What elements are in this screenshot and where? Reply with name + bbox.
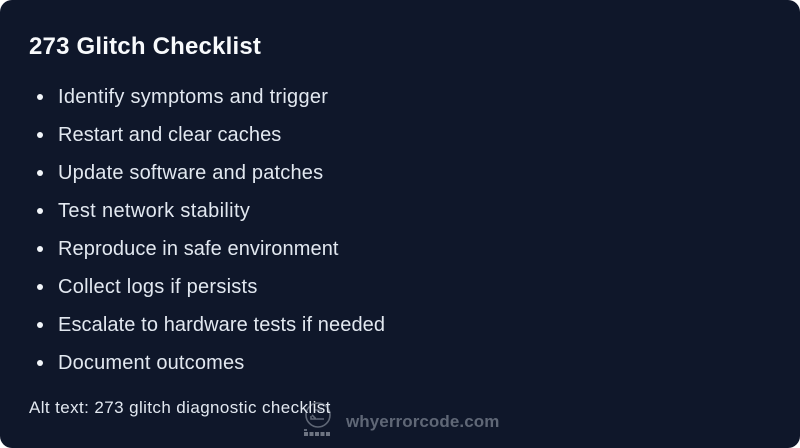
icon: watermark logo <box>304 402 331 436</box>
list item: network: Test network stability <box>58 200 250 222</box>
list item: reproduce: Reproduce in safe environment <box>58 238 339 260</box>
watermark: whyerrorcode.com <box>304 402 499 436</box>
title: 273 Glitch Checklist <box>29 33 261 60</box>
watermark text: whyerrorcode.com <box>346 412 499 431</box>
list item: escalate: Escalate to hardware tests if needed <box>58 314 385 336</box>
list item: identify symptoms: Identify symptoms and trigger <box>58 86 328 108</box>
list item: update: Update software and patches <box>58 162 323 184</box>
list item: restart: Restart and clear caches <box>58 124 281 146</box>
list item: document: Document outcomes <box>58 352 244 374</box>
alt text caption: Alt text: 273 glitch diagnostic checklist <box>29 398 331 417</box>
list item: logs: Collect logs if persists <box>58 276 258 298</box>
